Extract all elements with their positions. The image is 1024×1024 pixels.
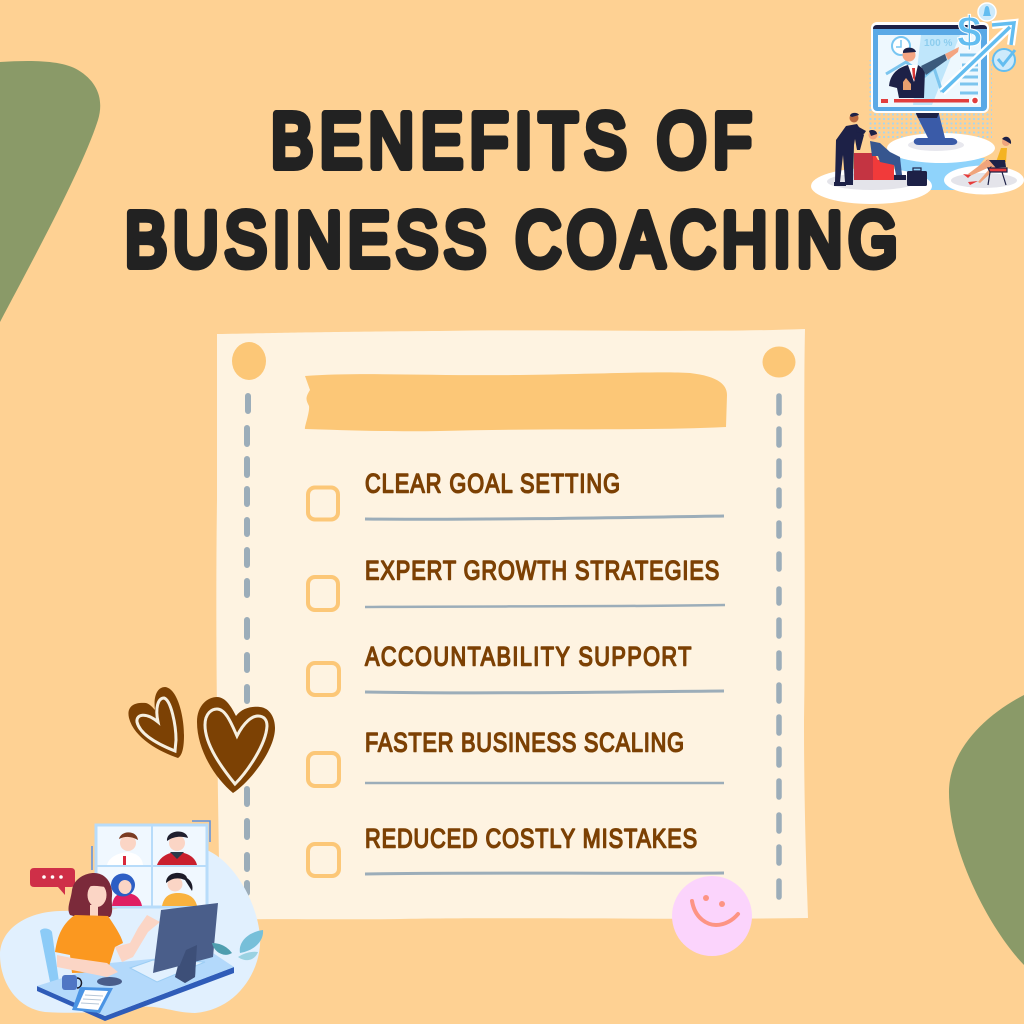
seated woman in yellow	[963, 137, 1011, 185]
icon: large heart	[197, 697, 275, 793]
clock	[892, 37, 910, 55]
woman	[55, 873, 160, 977]
check badge	[993, 49, 1015, 71]
white stage discs	[900, 158, 985, 190]
play bar	[881, 99, 888, 103]
speech bubble	[30, 868, 75, 895]
keyboard	[130, 960, 205, 982]
monitor	[153, 903, 218, 983]
icon: small heart	[128, 687, 184, 758]
red armchair with seated man	[854, 130, 906, 180]
green blob: right	[949, 695, 1024, 965]
presenter	[889, 65, 925, 98]
illustration: business coach presentation	[811, 3, 1024, 204]
stitching: right	[776, 396, 782, 897]
checklist item 2	[308, 557, 725, 610]
title: BUSINESS COACHING	[125, 196, 897, 282]
chart line	[886, 62, 942, 92]
tablet	[72, 987, 113, 1013]
mug	[62, 975, 82, 990]
title	[125, 97, 897, 282]
panel: checklist card	[216, 329, 808, 920]
binder hole: right	[762, 346, 796, 378]
banner	[305, 372, 727, 431]
chair back	[40, 928, 59, 982]
desk	[37, 953, 234, 1021]
checklist item 3: ACCOUNTABILITY SUPPORT	[365, 643, 692, 672]
100 percent label: 100 %	[924, 38, 952, 49]
participant: woman with ponytail	[162, 873, 197, 906]
illustration: video conference	[0, 821, 263, 1021]
blue blob background	[0, 850, 260, 1013]
growth arrow	[942, 23, 1014, 92]
title: BENEFITS OF	[271, 97, 752, 183]
checklist item 4: FASTER BUSINESS SCALING	[365, 729, 684, 758]
mouse	[97, 977, 122, 986]
checklist item 1	[308, 470, 724, 520]
video call window	[92, 821, 210, 907]
document lines	[960, 55, 978, 93]
icon: smiley sticker	[672, 876, 752, 956]
dollar sign: $	[957, 8, 981, 57]
monitor	[871, 22, 989, 113]
participant: man in white shirt	[107, 832, 143, 865]
checklist item 3	[308, 643, 724, 695]
plant	[212, 930, 263, 960]
checklist item 4	[308, 729, 724, 786]
halftone backdrop	[868, 60, 992, 138]
binder hole: left	[232, 342, 266, 380]
standing man	[834, 113, 866, 186]
participant: man in red shirt	[157, 832, 197, 865]
checklist item 5: REDUCED COSTLY MISTAKES	[365, 825, 697, 854]
green blob: top left	[0, 61, 100, 322]
participant: woman with blue hair	[111, 874, 142, 906]
stitching: left	[247, 396, 248, 893]
checklist item 2: EXPERT GROWTH STRATEGIES	[365, 557, 719, 586]
monitor stand	[914, 114, 957, 145]
checklist item 1: CLEAR GOAL SETTING	[365, 470, 620, 499]
bell icon	[978, 3, 996, 21]
checklist item 5	[308, 825, 724, 876]
briefcase	[907, 168, 927, 186]
